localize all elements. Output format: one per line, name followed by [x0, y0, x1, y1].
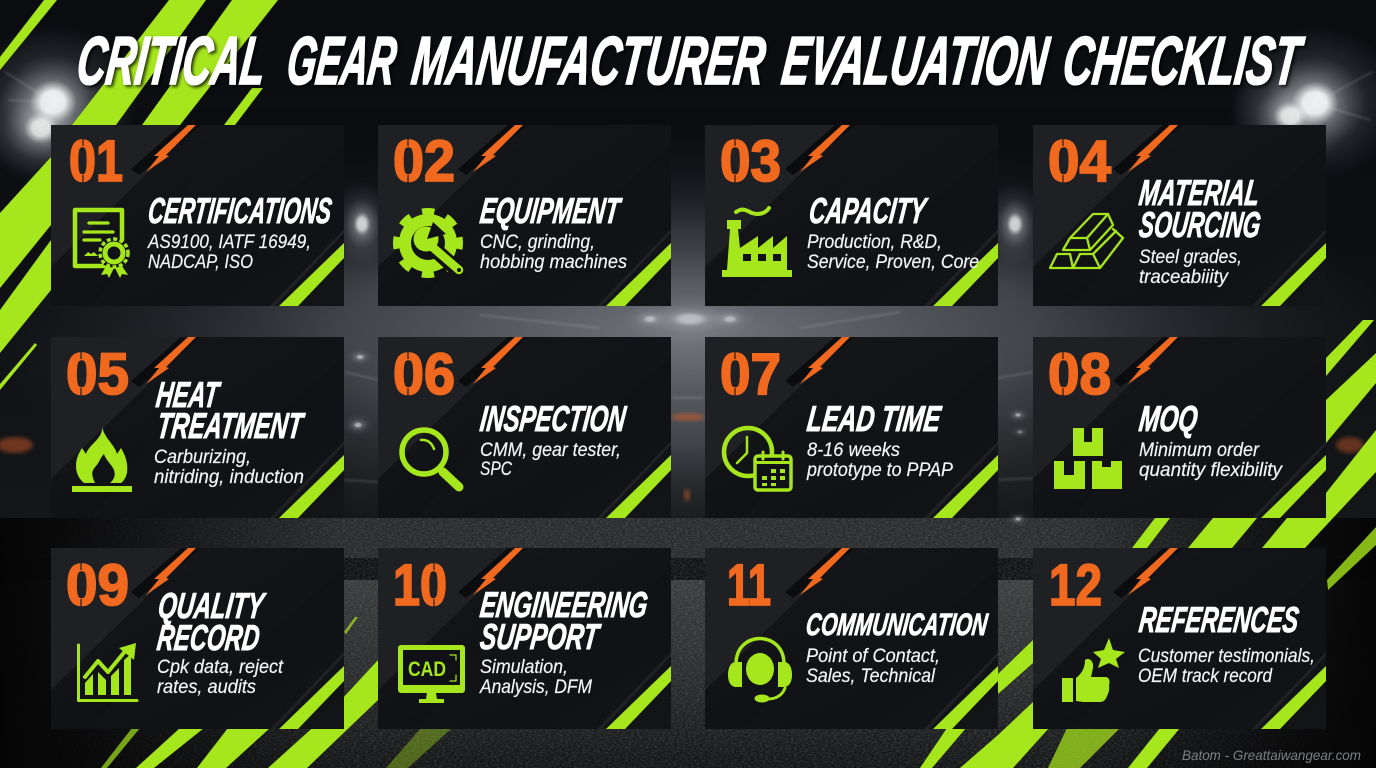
icon: gear and wrench — [397, 212, 461, 274]
heading: CERTIFICATIONS — [146, 190, 334, 231]
description: Minimum order — [1139, 440, 1260, 461]
lime diagonal stripes: right side — [1132, 320, 1376, 590]
heading: RECORD — [155, 617, 262, 658]
heading: COMMUNICATION — [804, 607, 990, 642]
icon: CAD monitor — [398, 645, 465, 703]
heading: TREATMENT — [155, 405, 307, 446]
description — [807, 232, 979, 273]
title: GEAR — [283, 23, 400, 99]
icon: thumbs up and star — [1062, 638, 1125, 702]
description: CMM, gear tester, — [480, 440, 621, 461]
icon: magnifying glass — [402, 430, 459, 487]
description — [154, 447, 304, 488]
description — [806, 646, 940, 687]
panel: 10 engineering support — [378, 548, 671, 729]
number 05: 05 — [66, 342, 129, 407]
description: Analysis, DFM — [479, 677, 592, 698]
title — [73, 23, 1308, 99]
description — [147, 232, 311, 273]
description: Carburizing, — [154, 447, 251, 468]
heading: EQUIPMENT — [478, 190, 624, 231]
description: Simulation, — [480, 657, 568, 678]
panel: 02 equipment — [378, 125, 671, 306]
number 08: 08 — [1048, 342, 1111, 407]
panel: 09 quality record — [51, 548, 344, 729]
description: Production, R&D, — [807, 232, 942, 253]
panel: 12 references — [1033, 548, 1326, 729]
heading: LEAD TIME — [805, 398, 944, 439]
description: Customer testimonials, — [1138, 646, 1315, 667]
icon: clock and calendar — [724, 428, 791, 490]
number 10: 10 — [393, 553, 447, 618]
icon: flame — [72, 427, 132, 492]
heading: SUPPORT — [478, 616, 603, 657]
heading: MATERIAL — [1137, 172, 1262, 213]
description — [1139, 247, 1242, 288]
panel: 08 moq — [1033, 337, 1326, 518]
lime diagonal stripes: top left — [0, 0, 278, 390]
icon: stacked boxes — [1054, 428, 1122, 489]
heading: CAPACITY — [807, 190, 930, 231]
number 02: 02 — [393, 129, 455, 194]
description: Sales, Technical — [806, 666, 936, 687]
description: Steel grades, — [1139, 247, 1242, 268]
heading: INSPECTION — [478, 398, 629, 439]
description: CNC, grinding, — [480, 232, 595, 253]
watermark credit: Batom - Greattaiwangear.com — [1182, 747, 1361, 763]
icon: certificate — [75, 210, 130, 278]
description: traceabiiity — [1139, 267, 1229, 288]
icon: CAD monitor: CAD — [408, 658, 446, 681]
number 07: 07 — [720, 342, 781, 407]
description: nitriding, induction — [154, 467, 304, 488]
lime diagonal stripes: bottom — [101, 617, 1180, 768]
description: Point of Contact, — [806, 646, 940, 667]
description — [480, 232, 627, 273]
panel: 11 communication — [705, 548, 998, 729]
number 01: 01 — [69, 129, 123, 194]
number 11: 11 — [727, 553, 771, 618]
panel: 04 material sourcing — [1033, 125, 1326, 306]
heading: SOURCING — [1137, 204, 1263, 245]
description: NADCAP, ISO — [148, 252, 253, 273]
description — [479, 657, 592, 698]
panel: 03 capacity — [705, 125, 998, 306]
heading: HEAT — [154, 374, 223, 415]
description: hobbing machines — [480, 252, 627, 273]
icon: rising chart — [78, 643, 137, 700]
number 09: 09 — [66, 553, 129, 618]
icon: metal ingots — [1050, 214, 1123, 268]
description: Cpk data, reject — [157, 657, 284, 678]
title: CRITICAL — [73, 23, 270, 99]
number 12: 12 — [1049, 553, 1102, 618]
description: 8-16 weeks — [807, 440, 900, 461]
description: SPC — [480, 459, 512, 480]
heading — [154, 374, 307, 446]
panel: 01 certifications — [51, 125, 344, 306]
description — [806, 440, 953, 481]
panel: 07 lead time — [705, 337, 998, 518]
description — [1139, 440, 1283, 481]
description: rates, audits — [157, 677, 256, 698]
number 04: 04 — [1048, 129, 1111, 194]
description: AS9100, IATF 16949, — [147, 232, 311, 253]
description — [157, 657, 284, 698]
description: Service, Proven, Core — [807, 252, 979, 273]
panel: 06 inspection — [378, 337, 671, 518]
heading — [1137, 172, 1263, 245]
panel: 05 heat treatment — [51, 337, 344, 518]
heading: ENGINEERING — [478, 584, 650, 625]
icon: factory — [722, 208, 792, 277]
description — [480, 440, 621, 480]
title: EVALUATION — [778, 23, 1054, 99]
icon: headset — [728, 638, 792, 702]
number 06: 06 — [393, 342, 455, 407]
description: OEM track record — [1138, 666, 1273, 687]
heading — [478, 584, 650, 657]
heading: QUALITY — [156, 585, 268, 626]
description — [1138, 646, 1315, 687]
heading — [155, 585, 268, 658]
title: MANUFACTURER — [408, 23, 769, 99]
description: prototype to PPAP — [806, 460, 953, 481]
heading: MOQ — [1137, 398, 1200, 439]
description: quantity flexibility — [1139, 460, 1283, 481]
number 03: 03 — [720, 129, 781, 194]
